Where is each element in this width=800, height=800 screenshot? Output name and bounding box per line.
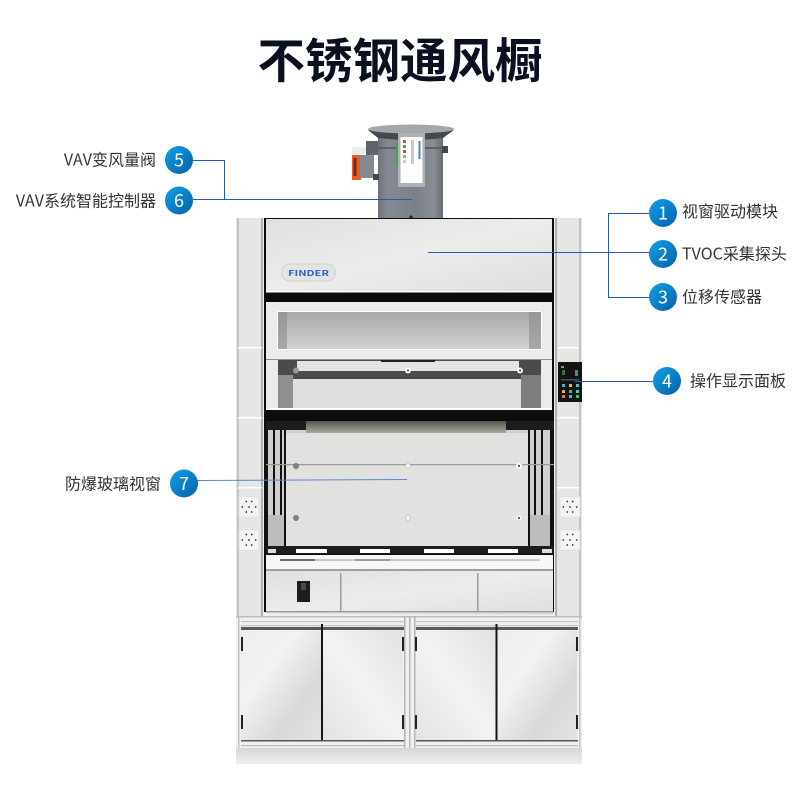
middle opening [266,360,552,410]
right column [555,218,582,616]
plinth [236,748,582,764]
callout 7 [65,470,198,498]
callout 1 [649,198,778,227]
callout 4: 4 [662,368,672,394]
leader line 4 [575,380,654,382]
handle bands [241,627,404,630]
callout 5: 5 [174,146,184,172]
leader line 7 [197,480,407,481]
callout 5: VAV变风量阀 [64,146,156,170]
glass opening [264,421,554,547]
sill slots [266,546,554,554]
top panel [266,219,552,292]
callout 3 [649,283,762,311]
icon: VAV duct and valve [352,124,454,219]
icon: right sockets [560,497,580,550]
callout 2: TVOC采集探头 [682,240,787,264]
leader lines 5 and 6 [193,160,412,200]
callout 2 [649,240,787,268]
panel: base cabinet [236,616,582,748]
control box [398,133,425,187]
hinges [241,637,243,651]
leader lines 1, 2 and 3 [428,214,652,298]
door 3 [416,630,496,740]
black frame [264,218,554,612]
callout 5 [64,146,193,174]
duct body [378,133,443,219]
logo: FINDER [288,268,330,279]
title: 不锈钢通风橱 [258,23,542,92]
door 1 [241,630,322,740]
panel: fume hood cabinet [236,218,582,616]
switch [297,581,310,602]
airfoil sill [266,555,553,571]
callout 1: 1 [658,200,668,226]
icon: operating display panel [558,362,582,402]
logo [282,264,336,281]
callout 2: 2 [658,240,668,266]
callout 3: 位移传感器 [682,284,762,308]
callout 6: VAV系统智能控制器 [16,188,156,212]
sash frame [266,302,552,360]
callout 4 [653,367,786,395]
callout 7: 防爆玻璃视窗 [65,470,161,494]
callout 6 [16,186,193,214]
callout 6: 6 [174,187,184,213]
callout 1: 视窗驱动模块 [682,198,778,222]
left column [236,218,263,616]
door 4 [498,630,577,740]
callout 7: 7 [179,470,189,496]
door gaps [321,624,323,740]
callout 4: 操作显示面板 [690,368,786,392]
valve actuator [352,155,361,180]
callout 3: 3 [658,284,668,310]
lower drawer panel [266,571,553,615]
top flange [368,130,454,140]
icon: left sockets [239,497,259,550]
door 2 [323,630,403,740]
